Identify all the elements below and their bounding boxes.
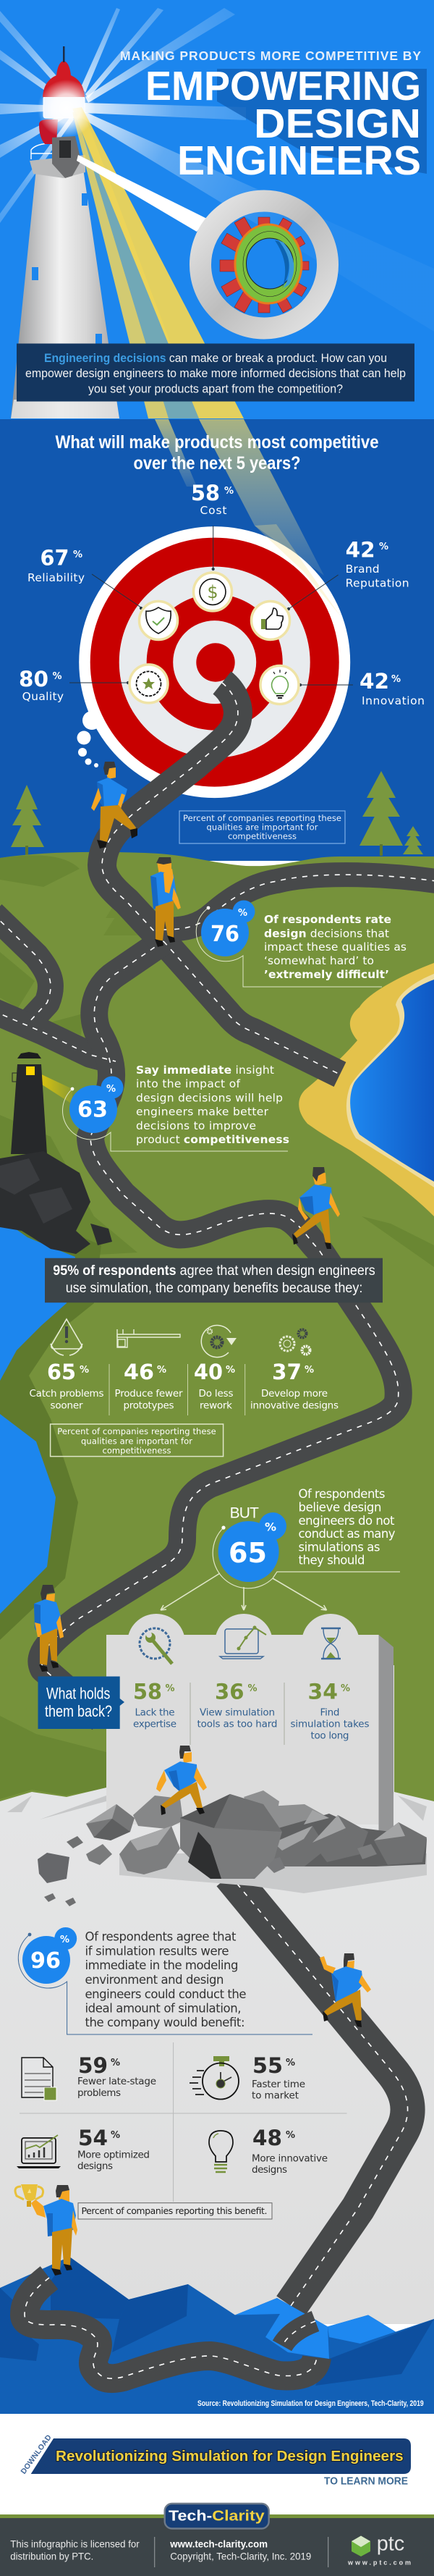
light rays: [0, 8, 434, 340]
stat: innovation: [359, 669, 425, 707]
callout: what holds them back: [38, 1677, 124, 1729]
text: 65 percent description: [298, 1487, 396, 1567]
note: percent of companies: Percent of companies reporting these: [183, 813, 341, 823]
intro line 3: you set your products apart from the competition?: [88, 382, 343, 395]
stat: too hard: View simulation: [200, 1706, 275, 1718]
stat: lack expertise: %: [165, 1683, 175, 1694]
man walking on first road: [91, 762, 137, 849]
stat: catch problems: [29, 1360, 104, 1411]
icon: light bulb: [260, 666, 299, 704]
hill shading: [0, 855, 137, 1799]
title shadow: [217, 69, 427, 174]
copyright text: www.tech-clarity.com: [169, 2538, 268, 2549]
stat: optimized designs: More optimized: [77, 2149, 150, 2160]
target: [79, 524, 350, 798]
benefit grid lines: [20, 2042, 347, 2202]
stat: fewer late-stage problems: %: [111, 2058, 120, 2068]
lantern glass: [43, 96, 85, 118]
icon: caliper: [117, 1329, 180, 1347]
text: 63 percent description: Say immediate insight: [136, 1064, 274, 1077]
panel: white download area: [0, 2414, 434, 2515]
text: 65 percent description: conduct as many: [298, 1527, 396, 1541]
magnifier handle: [77, 155, 207, 232]
stat: cost: %: [224, 486, 234, 497]
text: 63 percent description: [136, 1064, 289, 1146]
stat: lack expertise: expertise: [133, 1719, 176, 1730]
panel: header background: [0, 0, 434, 419]
stat: catch problems: 65: [47, 1360, 76, 1384]
stat: faster time to market: %: [286, 2058, 295, 2068]
stat: fewer late-stage problems: 59: [78, 2053, 108, 2078]
intro line 2: empower design engineers to make more informed decisions that can help: [25, 366, 406, 380]
antenna: [63, 46, 65, 62]
lighthouse tower: [11, 46, 119, 418]
stat: quality: [19, 667, 64, 703]
banner: 95 percent: [45, 1258, 383, 1302]
icon circle: hourglass: [302, 1614, 359, 1672]
lamp beam: [26, 1067, 72, 1104]
icon: star badge: [129, 665, 168, 703]
intro text box: [17, 343, 414, 401]
stat: takes too long: too long: [311, 1730, 349, 1742]
stat: innovation: %: [391, 674, 401, 685]
stat: innovative designs 2: %: [286, 2130, 295, 2141]
text: 65 percent description: engineers do not: [298, 1514, 395, 1528]
door block: [52, 136, 81, 178]
icon: warning hands: [51, 1319, 82, 1355]
ptc logo: [347, 2533, 411, 2567]
beam tint on target: [255, 524, 340, 615]
text: 63 percent description: decisions to improve: [136, 1119, 256, 1132]
banner: 95 percent: 95% of respondents agree that when design engineers: [53, 1263, 375, 1279]
text: 65 percent description: they should: [298, 1554, 365, 1567]
roads: [0, 683, 434, 1720]
license text: This infographic is licensed for: [10, 2538, 140, 2549]
download label: DOWNLOAD: [19, 2433, 54, 2476]
icon: thumbs up: [252, 601, 289, 640]
stat: lack expertise: [133, 1680, 176, 1730]
road through mountains: [25, 2278, 317, 2378]
note: percent of companies: competitiveness: [228, 831, 297, 841]
stat: less rework: 40: [194, 1360, 223, 1384]
note: percent reporting benefit: [78, 2203, 272, 2219]
icon: dollar: $: [207, 582, 218, 602]
boulder ground shadow: [119, 1853, 427, 1893]
icon circle: laptop: [215, 1614, 273, 1672]
panel: obstacles wall: [106, 1614, 393, 1832]
yellow searchlight beam: [72, 107, 324, 576]
text: 76 percent description: ’extremely difficult’: [264, 968, 389, 981]
text: 96 percent description: [85, 1930, 246, 2029]
banner: 95 percent: use simulation, the company benefits because they:: [66, 1281, 362, 1296]
stat: innovative designs: %: [305, 1365, 314, 1376]
stat: 96 percent: [18, 1927, 312, 2034]
callout: what holds them back: What holds: [46, 1684, 110, 1703]
stat: brand reputation: Reputation: [346, 576, 409, 589]
stat: quality: 80: [19, 667, 48, 691]
stat: quality: Quality: [22, 690, 64, 703]
text: 76 percent description: [264, 913, 407, 981]
icon: laptop chart: [17, 2135, 61, 2168]
stat: optimized designs: designs: [77, 2160, 113, 2172]
stat: 63 percent: [63, 1064, 289, 1151]
icon: bulb: [209, 2131, 233, 2172]
stat: cost: Cost: [200, 504, 227, 517]
stat: reliability: [27, 546, 85, 584]
stat: innovative designs: [250, 1360, 339, 1411]
stat: optimized designs: 54: [78, 2126, 108, 2150]
lamp glow: [38, 80, 95, 138]
icon circle: wrench: [127, 1614, 185, 1672]
stat: cost: [191, 481, 234, 517]
stat: fewer prototypes: prototypes: [123, 1399, 174, 1411]
stat: takes too long: [291, 1680, 369, 1742]
stat: less rework: %: [226, 1365, 235, 1376]
stat: lack expertise: Lack the: [135, 1706, 175, 1718]
download banner: [19, 2433, 411, 2488]
arrows: [161, 1573, 327, 1610]
logo badge: [165, 2504, 269, 2528]
panel: blue mountains: [0, 2257, 434, 2414]
stat: brand reputation: 42: [346, 537, 375, 562]
stat: innovative designs: innovative designs: [250, 1399, 339, 1411]
title kicker: MAKING PRODUCTS MORE COMPETITIVE BY: [120, 49, 421, 63]
text: 65 percent description: believe design: [298, 1500, 382, 1514]
stat: faster time to market: to market: [252, 2090, 299, 2102]
stat: brand reputation: Brand: [346, 563, 380, 576]
dome: [43, 61, 85, 97]
lantern base: [39, 119, 58, 144]
stat: 63 percent: %: [106, 1084, 116, 1095]
icon: dollar: [194, 573, 231, 611]
text: 63 percent description: engineers make better: [136, 1106, 269, 1119]
stat: fewer prototypes: %: [157, 1365, 166, 1376]
stat: innovation: 42: [359, 669, 389, 694]
title line 1: EMPOWERING: [145, 63, 421, 109]
man at junction: [150, 857, 181, 947]
text: 76 percent description: ‘somewhat hard’ to: [264, 954, 374, 967]
stat: lack expertise: 58: [133, 1680, 162, 1704]
stat: 96 percent: 96: [30, 1948, 61, 1974]
text: 96 percent description: immediate in the modeling: [85, 1958, 239, 1972]
text: 96 percent description: the company would benefit:: [85, 2016, 244, 2029]
note: percent of companies 2: Percent of companies reporting these: [57, 1426, 216, 1436]
stat: takes too long: simulation takes: [291, 1719, 369, 1730]
stat: optimized designs: [77, 2126, 150, 2172]
stat: faster time to market: [252, 2053, 305, 2102]
stat: takes too long: %: [341, 1683, 350, 1694]
stat: innovative designs 2: designs: [252, 2164, 287, 2176]
icon: gear loop: [201, 1326, 237, 1358]
left lake: [0, 1202, 101, 1640]
boulders: [38, 1790, 427, 1906]
ptc logo: www.ptc.com: [347, 2559, 411, 2567]
stat: fewer late-stage problems: Fewer late-stage: [77, 2076, 156, 2087]
callout lines: [69, 526, 353, 686]
stat: brand reputation: %: [379, 542, 388, 552]
stat: innovative designs 2: [252, 2126, 328, 2176]
stat: 76 percent: [196, 901, 407, 987]
panel: footer: [0, 2514, 434, 2576]
text: 76 percent description: impact these qualities as: [264, 940, 407, 954]
ptc logo: ptc: [377, 2533, 404, 2556]
stat: too hard: [197, 1680, 278, 1730]
stat: less rework: Do less: [198, 1388, 233, 1399]
light facets: [235, 2298, 396, 2359]
stat: innovative designs 2: More innovative: [252, 2153, 328, 2165]
text: 96 percent description: ideal amount of simulation,: [85, 2002, 242, 2016]
stat: 96 percent: %: [60, 1935, 69, 1945]
note: percent of companies 2: [51, 1424, 224, 1457]
stat: 65 percent: BUT: [230, 1505, 259, 1522]
stat: 76 percent: 76: [210, 922, 239, 947]
text: 96 percent description: if simulation results were: [85, 1944, 229, 1958]
text: 96 percent description: environment and design: [85, 1973, 224, 1987]
text: 96 percent description: engineers could conduct the: [85, 1987, 246, 2001]
icon: document: [22, 2058, 56, 2100]
text: 96 percent description: Of respondents agree that: [85, 1930, 237, 1943]
report name: Revolutionizing Simulation for Design Engineers: [56, 2449, 404, 2465]
panel: competitive section background: [0, 419, 434, 861]
trees: [11, 771, 423, 856]
gear mesh model: [220, 217, 309, 313]
stat: 65 percent: %: [265, 1520, 276, 1534]
rocks: [0, 1151, 90, 1254]
stat: brand reputation: [346, 537, 409, 589]
magnifier ring: [200, 201, 328, 329]
stat: innovative designs: Develop more: [261, 1388, 328, 1399]
stat: fewer prototypes: 46: [124, 1360, 154, 1384]
stat: catch problems: %: [80, 1365, 89, 1376]
stat: optimized designs: %: [111, 2130, 120, 2141]
copyright text: [169, 2538, 312, 2562]
note: percent of companies 2: qualities are important for: [81, 1436, 192, 1446]
stat: catch problems: Catch problems: [29, 1388, 104, 1399]
stat: too hard: 36: [215, 1680, 244, 1704]
stat: fewer prototypes: [114, 1360, 183, 1411]
text: 63 percent description: design decisions will help: [136, 1092, 283, 1105]
stat: innovative designs: 37: [272, 1360, 302, 1384]
note: percent of companies: [179, 811, 345, 843]
man climbing over rocks: [156, 1746, 207, 1815]
dark facets: [0, 2257, 434, 2386]
stat: reliability: %: [73, 550, 82, 560]
stat: reliability: 67: [41, 546, 69, 571]
stat: takes too long: Find: [320, 1706, 340, 1718]
stat: reliability: Reliability: [27, 571, 85, 584]
man with trophy: [15, 2184, 77, 2276]
dark lighthouse on rocks: [0, 1052, 112, 1254]
text: 65 percent description: Of respondents: [298, 1487, 385, 1501]
text: 63 percent description: product competitiveness: [136, 1133, 289, 1146]
stat: 63 percent: 63: [77, 1098, 108, 1122]
heading: competitive: What will make products most competitive: [55, 432, 379, 453]
icon: shield: [139, 601, 178, 640]
note: percent of companies: qualities are important for: [207, 822, 318, 833]
stat: catch problems: sooner: [51, 1399, 83, 1411]
stat: less rework: [194, 1360, 235, 1411]
stat: faster time to market: Faster time: [252, 2079, 305, 2090]
magnifier: [77, 155, 328, 329]
stat: takes too long: 34: [308, 1680, 338, 1704]
rail: [31, 143, 52, 159]
icon: stopwatch: [190, 2056, 239, 2100]
to learn more: TO LEARN MORE: [324, 2476, 408, 2488]
copyright text: Copyright, Tech-Clarity, Inc. 2019: [170, 2551, 312, 2562]
stat: innovation: Innovation: [362, 694, 425, 707]
man standing at cliff: [34, 1585, 64, 1672]
stat: too hard: tools as too hard: [197, 1719, 278, 1730]
tree in valley: [103, 877, 142, 935]
icon: gears: [280, 1329, 310, 1354]
note: percent reporting benefit: Percent of companies reporting this benefit.: [81, 2205, 268, 2216]
stat: less rework: rework: [200, 1399, 232, 1411]
stat: 76 percent: %: [238, 908, 247, 919]
man walking by lake: [292, 1167, 340, 1249]
mountain snow shading: [7, 1796, 427, 1821]
text: 76 percent description: design decisions that: [264, 927, 389, 940]
title line 2: DESIGN: [254, 101, 421, 147]
stat: too hard: %: [247, 1683, 258, 1694]
stat: faster time to market: 55: [252, 2053, 283, 2078]
stat: 65 percent: 65: [229, 1537, 267, 1569]
stat: fewer prototypes: Produce fewer: [114, 1388, 183, 1399]
stat: quality: %: [52, 671, 62, 682]
stat: fewer late-stage problems: problems: [77, 2087, 121, 2099]
road below boulders: [230, 1875, 408, 2306]
heading: competitive: [55, 432, 379, 473]
heading: competitive: over the next 5 years?: [133, 453, 301, 473]
right lake: [299, 963, 434, 1267]
note: percent of companies 2: competitiveness: [103, 1445, 171, 1455]
callout: what holds them back: them back?: [45, 1702, 112, 1720]
thought bubbles: [77, 711, 101, 767]
stat: 65 percent: [213, 1487, 400, 1588]
text: 76 percent description: Of respondents rate: [264, 913, 391, 926]
windows: [32, 193, 102, 344]
text: 63 percent description: into the impact of: [136, 1077, 241, 1090]
man on road: [320, 1953, 371, 2027]
license text: distribution by PTC.: [10, 2551, 93, 2562]
icon: trophy: [15, 2184, 43, 2207]
license text: [10, 2538, 140, 2562]
text: 65 percent description: simulations as: [298, 1541, 380, 1554]
title: [120, 49, 427, 184]
stat: innovative designs 2: 48: [252, 2126, 282, 2150]
title line 3: ENGINEERS: [177, 138, 421, 184]
stat: fewer late-stage problems: [77, 2053, 156, 2099]
collar: [30, 155, 85, 178]
stat: cost: 58: [191, 481, 220, 505]
panel: lower grey field: [0, 1665, 434, 2324]
panel: green landscape: [0, 852, 434, 1803]
intro line 1: Engineering decisions can make or break a product. How can you: [44, 351, 387, 365]
logo badge: Tech- Clarity: [169, 2509, 265, 2525]
